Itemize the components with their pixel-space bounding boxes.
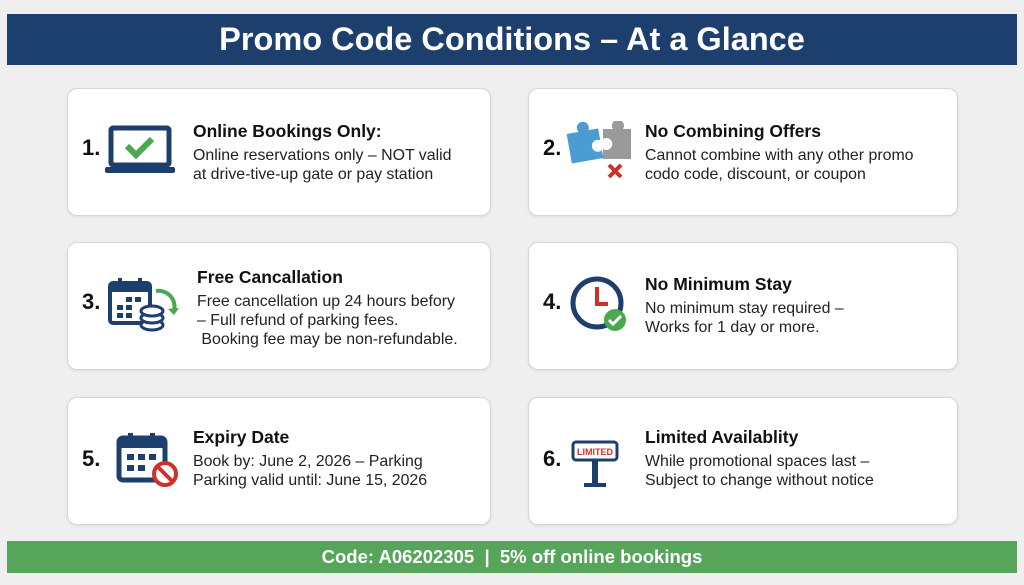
text: While promotional spaces last – [645, 453, 869, 470]
text: Parking valid until: June 15, 2026 [193, 472, 427, 489]
text: Free cancellation up 24 hours befory [197, 293, 455, 310]
text: No Combining Offers [645, 121, 821, 141]
text [197, 267, 458, 348]
text [645, 274, 844, 336]
text: Booking fee may be non-refundable. [201, 331, 458, 348]
text: Subject to change without notice [645, 472, 874, 489]
icon: laptop check [105, 126, 175, 173]
title: Promo Code Conditions – At a Glance [219, 21, 805, 57]
number 2: 2. [543, 135, 561, 160]
text: Works for 1 day or more. [645, 319, 820, 336]
text: Expiry Date [193, 427, 289, 447]
text: codo code, discount, or coupon [645, 166, 866, 183]
panel: 5 expiry date [67, 397, 491, 525]
footer code bar [7, 541, 1017, 573]
text: Free Cancallation [197, 267, 343, 287]
text: Online reservations only – NOT valid [193, 147, 452, 164]
icon: clock check [570, 276, 626, 331]
icon: limited sign [572, 440, 618, 487]
number 1: 1. [82, 135, 100, 160]
text: Book by: June 2, 2026 – Parking [193, 453, 423, 470]
icon: calendar no [116, 433, 178, 487]
text [645, 121, 914, 183]
text [193, 427, 427, 489]
text: Cannot combine with any other promo [645, 147, 914, 164]
text: – Full refund of parking fees. [197, 312, 398, 329]
text [193, 121, 452, 183]
text [645, 427, 874, 489]
icon: calendar coins [108, 278, 179, 332]
number 3: 3. [82, 289, 100, 314]
title [7, 14, 1017, 65]
text: No minimum stay required – [645, 300, 844, 317]
panel: 1 online bookings [67, 88, 491, 216]
text: Limited Availablity [645, 427, 798, 447]
icon: puzzle x [566, 121, 631, 178]
text: Online Bookings Only: [193, 121, 382, 141]
panel: 3 free cancellation [67, 242, 491, 370]
number 4: 4. [543, 289, 561, 314]
panel: 2 no combining [528, 88, 958, 216]
number 5: 5. [82, 446, 100, 471]
panel: 6 limited availability [528, 397, 958, 525]
footer code bar: Code: A06202305 | 5% off online bookings [322, 546, 702, 567]
number 6: 6. [543, 446, 561, 471]
icon: limited sign: LIMITED [577, 447, 613, 457]
text: at drive-tive-up gate or pay station [193, 166, 433, 183]
panel: 4 no minimum stay [528, 242, 958, 370]
text: No Minimum Stay [645, 274, 792, 294]
